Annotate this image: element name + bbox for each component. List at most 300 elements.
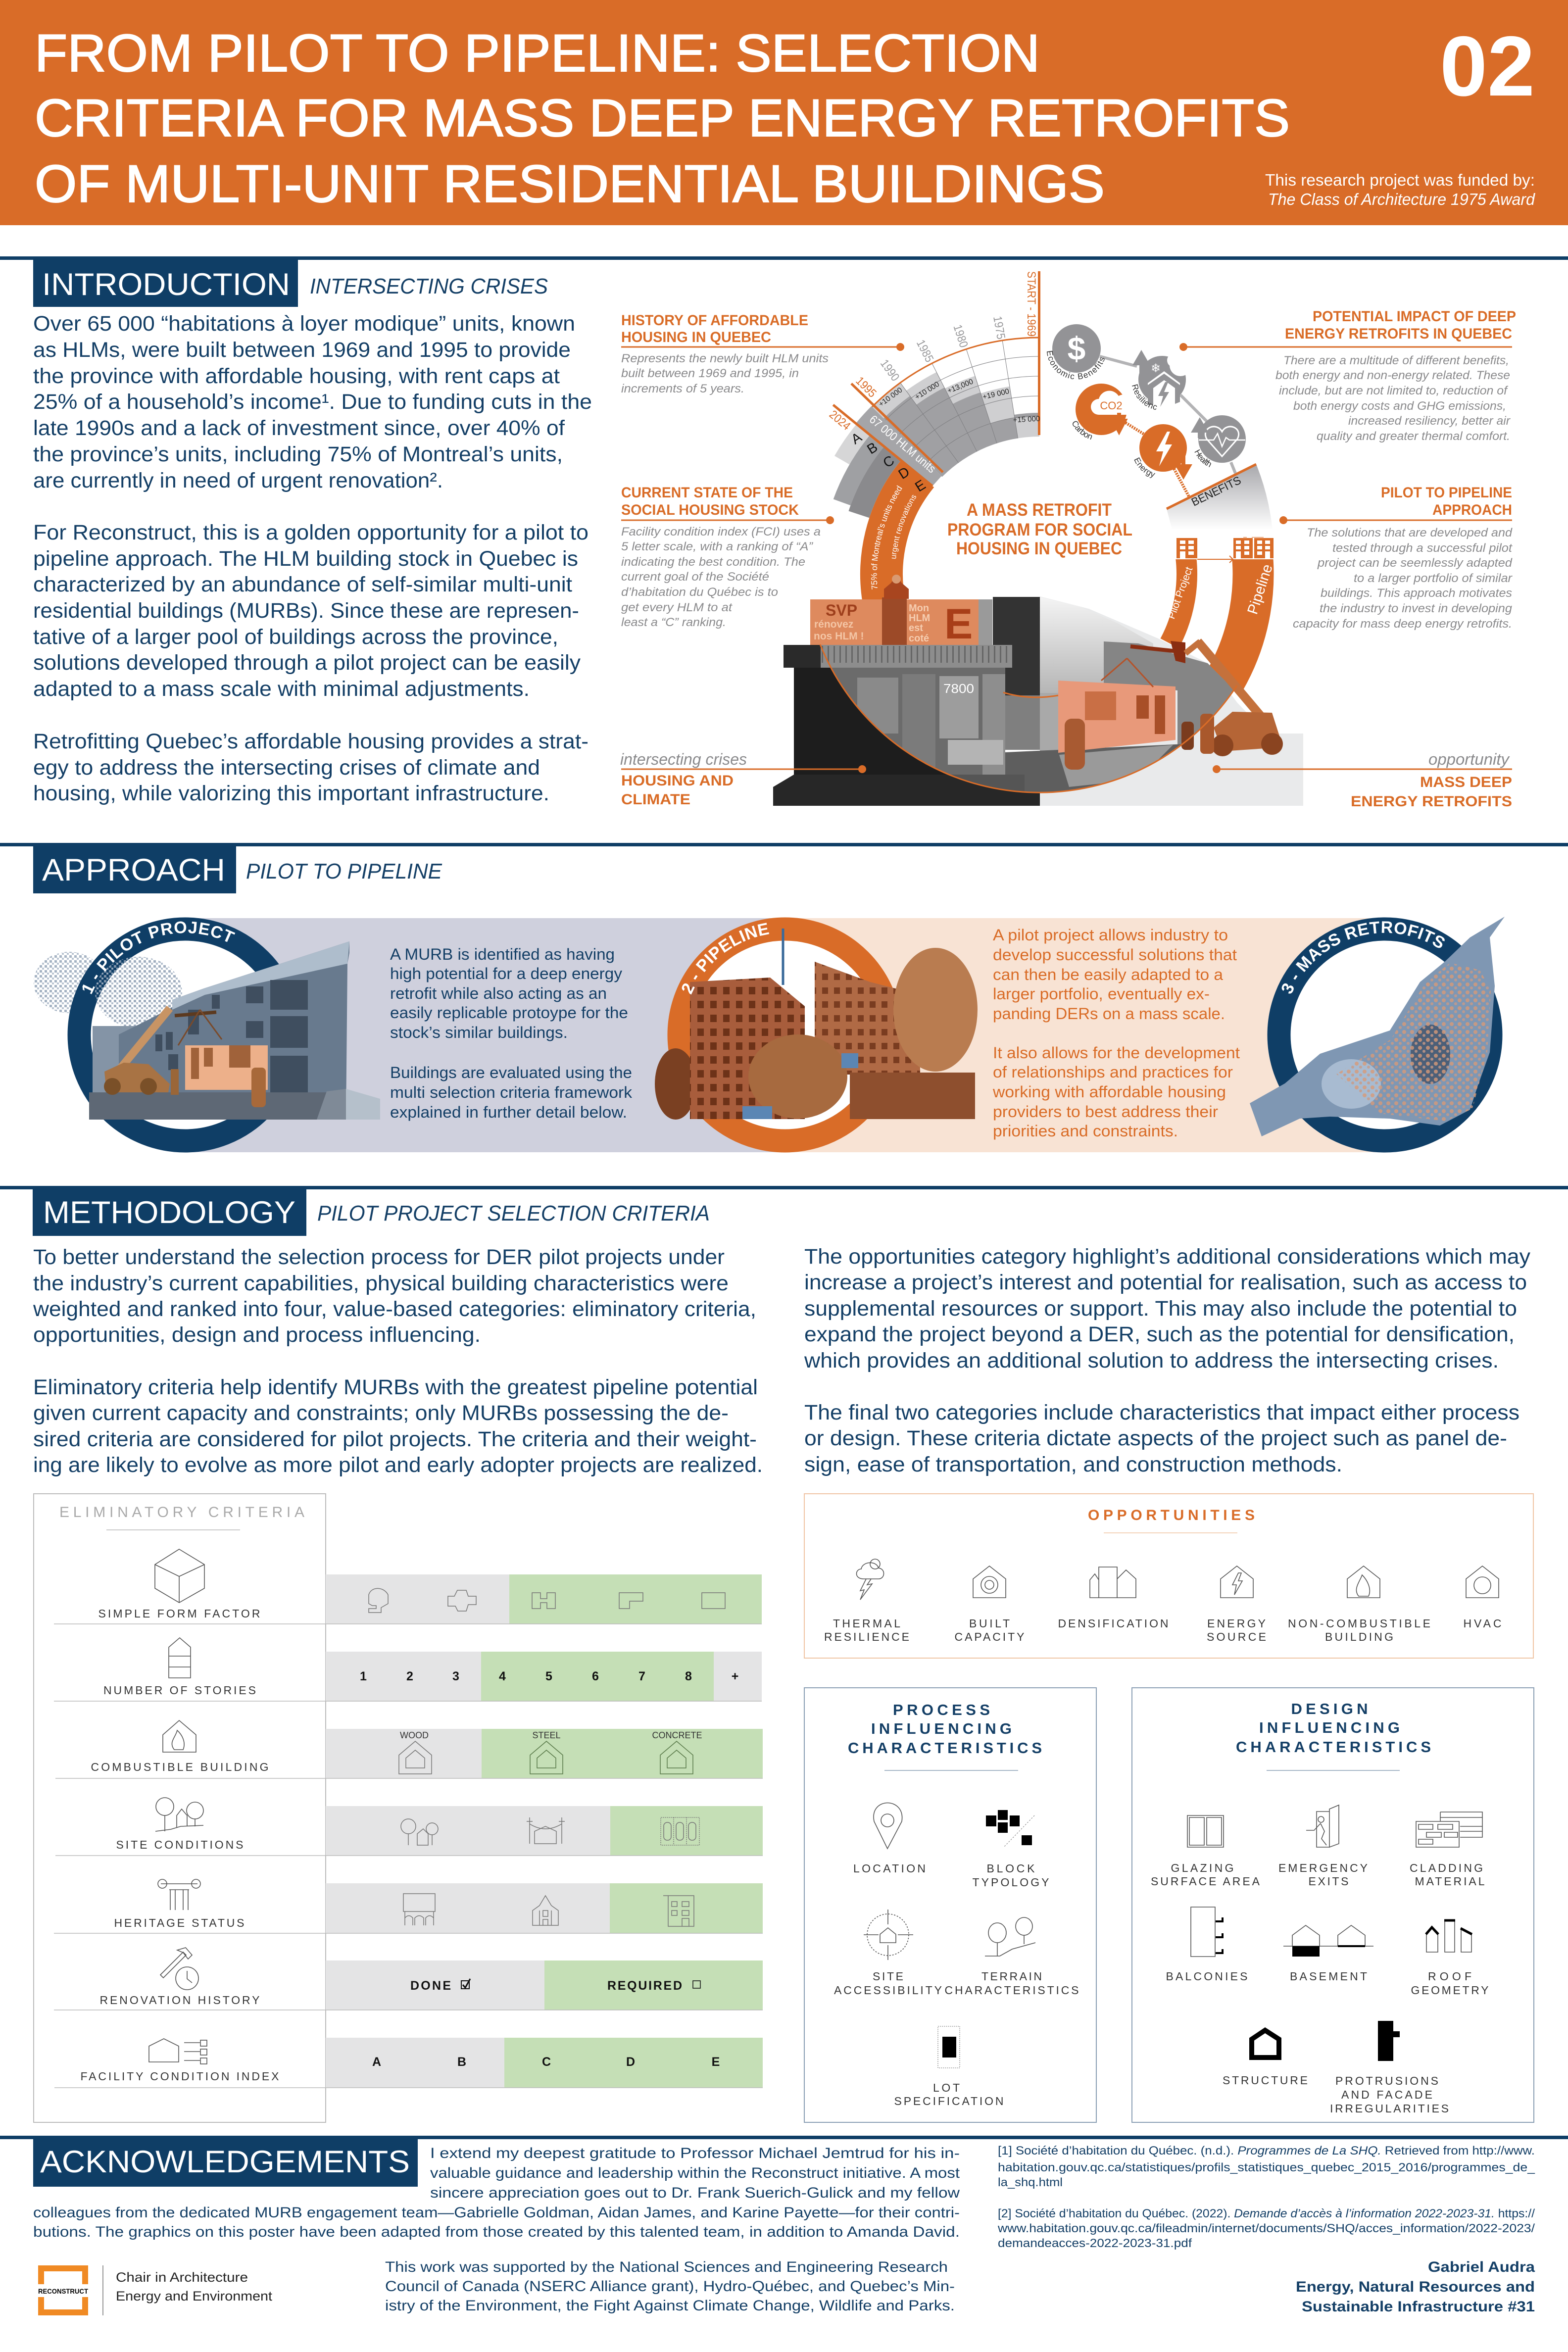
callout: housing and climate: intersecting crises: [620, 750, 747, 768]
text: pilot project: A MURB is identified as having: [390, 945, 615, 963]
callout: housing and climate: CLIMATE: [621, 791, 690, 808]
callout: potential impact: both energy costs and GHG emissions,: [1293, 399, 1506, 413]
callout: history of affordable housing: Represents the newly built HLM units: [621, 352, 829, 365]
row: site conditions: SITE CONDITIONS: [116, 1838, 244, 1851]
benefits network: [0, 0, 1246, 496]
scale: storey numbers: 3: [452, 1669, 459, 1683]
icon: economic benefits: Economic Benefits: [1045, 350, 1107, 382]
panel: methodology: [0, 1186, 1568, 2122]
text: right column: increase a project’s interest and potential for realisation, such as access to: [804, 1271, 1527, 1294]
callout: pilot to pipeline approach: tested through a successful pilot: [1332, 541, 1513, 555]
text: pipeline: panding DERs on a mass scale.: [993, 1005, 1225, 1023]
item: balconies: [1166, 1907, 1247, 1983]
protest banners: [810, 575, 992, 648]
intro text: egy to address the intersecting crises of climate and: [33, 756, 540, 780]
callout: current state of stock: 5 letter scale, with a ranking of “A”: [621, 540, 813, 553]
text: pilot project: Buildings are evaluated using the: [390, 1064, 632, 1081]
label: 2 - pipeline: 2 - PIPELINE: [678, 920, 771, 997]
icon: resiliency: ❄: [1151, 362, 1161, 375]
callout: history of affordable housing: [621, 312, 904, 395]
item: roof geometry: [1411, 1920, 1489, 1997]
row: heritage status: [54, 1879, 763, 1933]
heading: acknowledgements: ACKNOWLEDGEMENTS: [40, 2145, 410, 2179]
references: habitation.gouv.qc.ca/statistiques/profils_statistiques_quebec_2015_2016/programmes_de_: [998, 2161, 1535, 2174]
subheading: pilot to pipeline: PILOT TO PIPELINE: [246, 859, 442, 883]
text: right column: or design. These criteria dictate aspects of the project such as panel de-: [804, 1426, 1507, 1450]
item: structure: STRUCTURE: [1223, 2074, 1308, 2087]
done and required: DONE: [410, 1979, 451, 1993]
callout: potential impact: There are a multitude of different benefits,: [1283, 354, 1509, 367]
item: lot specification: LOT: [933, 2081, 960, 2094]
icon: hammer and clock: [160, 1948, 198, 1990]
diagram: mass retrofit wheel: [0, 0, 1516, 819]
icon: pipeline buildings: [1233, 516, 1274, 558]
text: pipeline: can then be easily adapted to a: [993, 966, 1223, 983]
logo: reconstruct: Energy and Environment: [116, 2289, 273, 2303]
references: www.habitation.gouv.qc.ca/fileadmin/internet/documents/SHQ/acces_information/2022-2023/: [997, 2222, 1535, 2235]
item: densification: [1058, 1567, 1168, 1630]
text: left column: opportunities, design and process influencing.: [33, 1323, 481, 1347]
label: 1 - pilot project: 1 - PILOT PROJECT: [78, 918, 237, 997]
callout: history of affordable housing: HISTORY OF AFFORDABLE: [621, 312, 808, 329]
callout: current state of stock: d’habitation du Québec is to: [621, 586, 778, 599]
item: roof geometry: ROOF: [1428, 1970, 1471, 1983]
item: terrain characteristics: TERRAIN: [981, 1970, 1042, 1983]
chart: facility condition index bands: C: [880, 452, 897, 471]
intro text: 25% of a household’s income¹. Due to funding cuts in the: [33, 390, 592, 414]
heading: design influencing: [1236, 1700, 1431, 1770]
text: pilot project: explained in further detail below.: [390, 1103, 627, 1121]
item: basement: [1283, 1925, 1373, 1983]
text: pipeline: priorities and constraints.: [993, 1122, 1178, 1140]
scale: storey numbers: 4: [499, 1669, 506, 1683]
row: combustible building: COMBUSTIBLE BUILDING: [91, 1761, 268, 1773]
scale: letters: D: [626, 2055, 635, 2069]
callout: potential impact: [1179, 308, 1516, 443]
intro text: [33, 312, 592, 805]
icons: site options: [401, 1817, 699, 1845]
intro text: residential buildings (MURBs). Since these are represen-: [33, 599, 579, 623]
intro text: For Reconstruct, this is a golden opportunity for a pilot to: [33, 521, 588, 544]
protest banners: rénovez: [814, 619, 853, 630]
item: terrain characteristics: [944, 1917, 1079, 1997]
funding statement: Council of Canada (NSERC Alliance grant), Hydro-Québec, and Quebec’s Min-: [385, 2278, 955, 2295]
icon: carbon: [1070, 384, 1135, 441]
item: glazing surface area: SURFACE AREA: [1151, 1875, 1260, 1888]
heading: acknowledgements: [33, 2139, 418, 2187]
text: pipeline: working with affordable housing: [992, 1083, 1226, 1101]
scale: letters: E: [712, 2055, 720, 2069]
scale: letters: A: [372, 2055, 381, 2069]
heading: process influencing: INFLUENCING: [871, 1720, 1012, 1737]
intro text: tative of a larger pool of buildings across the province,: [33, 625, 558, 649]
scale: storey numbers: 6: [592, 1669, 599, 1683]
diagram heading: PROGRAM FOR SOCIAL: [947, 520, 1132, 539]
text: pipeline: It also allows for the development: [993, 1044, 1240, 1062]
chart: HLM units built per five-year increment: 1995: [853, 374, 879, 400]
diagram heading: [947, 500, 1132, 558]
callout: potential impact: both energy and non-energy related. These: [1275, 369, 1510, 382]
item: glazing surface area: [1151, 1815, 1260, 1888]
pilot and pipeline bands: [1166, 464, 1276, 681]
panel: approach: [0, 843, 1568, 1152]
item: hvac: HVAC: [1463, 1617, 1502, 1630]
item: built capacity: [954, 1566, 1025, 1643]
logo: reconstruct: Chair in Architecture: [116, 2270, 248, 2285]
step 3: mass retrofits: [1250, 917, 1505, 1141]
chart: facility condition index bands: A: [848, 429, 865, 447]
chart: facility condition index bands: E: [912, 477, 928, 495]
header banner: [0, 0, 1568, 225]
callout: mass deep energy retrofits: [1213, 750, 1512, 810]
icon: energy: Energy: [1132, 456, 1157, 480]
callout: current state of stock: least a “C” ranking.: [621, 616, 726, 629]
text: pilot project: easily replicable protoype for the: [390, 1004, 628, 1022]
item: site accessibility: SITE: [873, 1970, 903, 1983]
scale: storey numbers: 2: [406, 1669, 413, 1683]
text: pipeline: larger portfolio, eventually ex-: [993, 985, 1210, 1003]
text: pipeline: A pilot project allows industry to: [993, 926, 1228, 944]
scale: storey numbers: 1: [360, 1669, 367, 1683]
author: Energy, Natural Resources and: [1296, 2279, 1535, 2295]
arrow: pilot to pipeline: [1197, 556, 1233, 563]
prefab retrofit panel: [1058, 658, 1176, 770]
scale: letters: [372, 2055, 720, 2069]
item: built capacity: BUILT: [969, 1617, 1010, 1630]
heading: methodology: [33, 1189, 306, 1236]
item: lot specification: [894, 2026, 1004, 2107]
text: pilot project: retrofit while also acting as an: [390, 984, 607, 1002]
row: facility condition index: FACILITY CONDITION INDEX: [80, 2070, 279, 2083]
callout: history of affordable housing: HOUSING IN QUEBEC: [621, 329, 771, 345]
text: right column: The opportunities category highlight’s additional considerations which may: [804, 1245, 1531, 1269]
item: non-combustible building: NON-COMBUSTIBLE: [1288, 1617, 1430, 1630]
text: acknowledgements: [33, 2145, 960, 2240]
chart: HLM units built per five-year increment: +15 000: [1013, 415, 1040, 424]
subheading: selection criteria: PILOT PROJECT SELECTION CRITERIA: [317, 1201, 710, 1225]
intro text: housing, while valorizing this important infrastructure.: [33, 782, 549, 805]
label: 3 - mass retrofits: 3 - MASS RETROFITS: [1277, 918, 1448, 997]
icon: flame house: [163, 1720, 196, 1752]
intro text: the province with affordable housing, with rent caps at: [33, 364, 560, 388]
heading: process influencing: [848, 1701, 1042, 1770]
text: pipeline: [992, 926, 1240, 1140]
item: built capacity: CAPACITY: [954, 1630, 1025, 1643]
item: site accessibility: ACCESSIBILITY: [834, 1984, 942, 1997]
icon: pilot building: [1176, 538, 1197, 558]
heading: introduction: INTRODUCTION: [42, 267, 290, 302]
heading: approach: [33, 846, 236, 893]
text: pilot project: stock’s similar buildings.: [390, 1024, 568, 1041]
intro text: characterized by an abundance of self-similar multi-unit: [33, 573, 572, 596]
callout: potential impact: increased resiliency, better air: [1348, 414, 1511, 428]
text: pipeline: develop successful solutions that: [993, 946, 1237, 964]
item: thermal resilience: RESILIENCE: [824, 1630, 909, 1643]
chart: HLM units built per five-year increment: 1990: [878, 357, 902, 384]
band: background strips: [185, 918, 1385, 1152]
image: pilot building: [89, 941, 380, 1120]
title: FROM PILOT TO PIPELINE: SELECTION: [35, 23, 1040, 83]
panel: design influencing characteristics: [1132, 1688, 1534, 2122]
callout: potential impact: POTENTIAL IMPACT OF DEEP: [1313, 308, 1516, 325]
icon: resiliency: Resiliency: [0, 0, 1159, 412]
chart: facility condition index bands: [833, 384, 943, 607]
funding statement: [385, 2259, 955, 2314]
chart: HLM units built per five-year increment: 2024: [827, 408, 853, 433]
item: location: [853, 1803, 926, 1875]
item: lot specification: SPECIFICATION: [894, 2095, 1004, 2107]
item: energy source: [1207, 1566, 1266, 1643]
item: structure: [1223, 2030, 1308, 2087]
chart: facility condition index bands: 67 000 HLM units: [867, 413, 938, 476]
materials: WOOD: [400, 1730, 429, 1740]
text: acknowledgements: butions. The graphics on this poster have been adapted from those created by this talented team, in addition to Amanda David.: [33, 2224, 960, 2240]
item: site accessibility: [834, 1910, 942, 1997]
scale: storey numbers: 8: [685, 1669, 692, 1683]
row: renovation history: [54, 1948, 763, 2010]
callout: pilot to pipeline approach: The solutions that are developed and: [1307, 526, 1513, 539]
row: number of stories: [54, 1638, 762, 1701]
callout: mass deep energy retrofits: opportunity: [1428, 750, 1510, 768]
callout: pilot to pipeline approach: [1279, 485, 1513, 631]
scale: letters: C: [542, 2055, 551, 2069]
icons: wall sections: [399, 1741, 693, 1774]
intro text: solutions developed through a pilot project can be easily: [33, 651, 581, 675]
title: OF MULTI-UNIT RESIDENTIAL BUILDINGS: [35, 154, 1105, 213]
image: pipeline towers: [655, 929, 978, 1120]
row: heritage status: HERITAGE STATUS: [114, 1916, 245, 1929]
callout: housing and climate: HOUSING AND: [621, 773, 734, 789]
panel: introduction: [0, 256, 1568, 810]
text: right column: The final two categories include characteristics that impact either process: [804, 1401, 1519, 1424]
callout: current state of stock: indicating the best condition. The: [621, 555, 805, 569]
callout: pilot to pipeline approach: PILOT TO PIPELINE: [1381, 485, 1512, 501]
diagram heading: A MASS RETROFIT: [967, 500, 1112, 520]
item: energy source: ENERGY: [1207, 1617, 1266, 1630]
icon: economic benefits: $: [1068, 330, 1085, 367]
item: block typology: TYPOLOGY: [972, 1876, 1049, 1889]
callout: current state of stock: SOCIAL HOUSING STOCK: [621, 502, 799, 518]
callout: current state of stock: [621, 485, 834, 629]
protest banners: est: [909, 623, 923, 634]
icon: carbon: CO2: [1100, 399, 1123, 412]
diagram heading: HOUSING IN QUEBEC: [956, 539, 1122, 558]
item: emergency exits: EXITS: [1309, 1875, 1348, 1888]
icon: house and checklist: [149, 2039, 207, 2064]
scale: storey numbers: +: [732, 1669, 738, 1683]
references: la_shq.html: [998, 2176, 1063, 2189]
pilot and pipeline bands: Pipeline: [1244, 562, 1276, 616]
text: pilot project: high potential for a deep energy: [390, 965, 622, 982]
step 1: pilot project: [34, 918, 380, 1141]
heading: methodology: METHODOLOGY: [43, 1195, 295, 1230]
callout: housing and climate: [620, 750, 866, 808]
item: emergency exits: EMERGENCY: [1278, 1862, 1368, 1874]
item: terrain characteristics: CHARACTERISTICS: [944, 1984, 1079, 1997]
text: right column: sign, ease of transportation, and construction methods.: [804, 1453, 1342, 1476]
intro text: Over 65 000 “habitations à loyer modique” units, known: [33, 312, 575, 336]
chart: facility condition index bands: B: [864, 439, 880, 457]
item: thermal resilience: [824, 1559, 909, 1643]
panel: process influencing characteristics: [804, 1688, 1096, 2122]
benefits band: BENEFITS: [1189, 474, 1243, 508]
row: facility condition index: [54, 2038, 763, 2088]
crane: [1130, 641, 1283, 756]
references: [997, 2144, 1535, 2250]
text: left column: Eliminatory criteria help identify MURBs with the greatest pipeline potential: [33, 1375, 758, 1399]
text: right column: which provides an additional solution to address the intersecting crises.: [804, 1349, 1499, 1372]
item: protrusions and facade irregularities: IRREGULARITIES: [1330, 2102, 1449, 2115]
protest banners: coté: [909, 633, 929, 644]
heading: opportunities: OPPORTUNITIES: [1088, 1507, 1255, 1523]
icons: heritage options: [403, 1894, 694, 1926]
row: combustible building: [55, 1720, 763, 1778]
chart: facility condition index bands: D: [895, 464, 912, 482]
text: acknowledgements: colleagues from the dedicated MURB engagement team—Gabrielle Goldman, Aidan James, and Karine Payette—for their contri-: [33, 2205, 960, 2221]
item: block typology: BLOCK: [987, 1862, 1035, 1875]
scale: storey numbers: 5: [545, 1669, 552, 1683]
text: right column: supplemental resources or support. This may also include the potential to: [804, 1297, 1517, 1321]
text: right column: [804, 1245, 1531, 1476]
text: left column: To better understand the selection process for DER pilot projects under: [33, 1245, 725, 1269]
photo collage: housing and retrofit: [773, 575, 1303, 819]
protest banners: nos HLM !: [814, 631, 864, 642]
icons: form options: [369, 1588, 725, 1613]
item: protrusions and facade irregularities: AND FACADE: [1341, 2088, 1432, 2101]
intro text: the province’s units, including 75% of Montreal’s units,: [33, 442, 563, 466]
item: location: LOCATION: [853, 1862, 926, 1875]
references: [2] Société d’habitation du Québec. (2022). Demande d’accès à l’information 2022-2023-31. https://: [998, 2207, 1535, 2220]
done and required: [410, 1979, 700, 1993]
chart centre disc: [902, 437, 1177, 712]
panel: acknowledgements: [0, 2136, 1568, 2315]
references: demandeacces-2022-2023-31.pdf: [998, 2237, 1192, 2250]
funding note: [1265, 171, 1536, 208]
scale: storey numbers: [360, 1669, 738, 1683]
callout: history of affordable housing: increments of 5 years.: [621, 382, 744, 395]
icon: health: Health: [1192, 448, 1214, 469]
pilot and pipeline bands: Pilot Project: [1166, 565, 1195, 621]
callout: history of affordable housing: built between 1969 and 1995, in: [621, 367, 799, 380]
heading: approach: APPROACH: [42, 853, 225, 887]
callout: potential impact: include, but are not limited to, reduction of: [1279, 384, 1508, 397]
intro text: are currently in need of urgent renovation².: [33, 469, 443, 492]
heading: eliminatory criteria: ELIMINATORY CRITERIA: [59, 1504, 304, 1520]
icon: carbon: Carbon: [1070, 419, 1094, 441]
callout: pilot to pipeline approach: project can be seemlessly adapted: [1317, 556, 1513, 570]
heading: design influencing: DESIGN: [1291, 1700, 1368, 1717]
funding statement: istry of the Environment, the Fight Against Climate Change, Wildlife and Parks.: [385, 2298, 955, 2314]
chart: HLM units built per five-year increment: 1985: [914, 338, 936, 364]
callout: current state of stock: current goal of the Société: [621, 570, 769, 584]
item: cladding material: CLADDING: [1410, 1862, 1483, 1874]
intro text: pipeline approach. The HLM building stock in Quebec is: [33, 547, 578, 571]
item: non-combustible building: BUILDING: [1325, 1630, 1393, 1643]
text: left column: weighted and ranked into four, value-based categories: eliminatory criteria,: [33, 1297, 756, 1321]
row: renovation history: RENOVATION HISTORY: [100, 1994, 259, 2007]
item: hvac: [1463, 1566, 1502, 1630]
text: acknowledgements: I extend my deepest gratitude to Professor Michael Jemtrud for his in-: [430, 2145, 960, 2161]
item: non-combustible building: [1288, 1566, 1430, 1643]
chart: HLM units built per five-year increment: [827, 271, 1177, 712]
item: densification: DENSIFICATION: [1058, 1617, 1168, 1630]
text: right column: expand the project beyond a DER, such as the potential for densification,: [804, 1323, 1515, 1346]
author: Sustainable Infrastructure #31: [1302, 2299, 1535, 2315]
chart: facility condition index bands: 75% of Montreal’s units need: [871, 485, 902, 589]
intro text: late 1990s and a lack of investment since, over 40% of: [33, 416, 565, 440]
callout: potential impact: ENERGY RETROFITS IN QUEBEC: [1285, 326, 1512, 342]
text: pipeline: providers to best address their: [993, 1103, 1218, 1121]
done and required: REQUIRED: [607, 1979, 682, 1993]
item: cladding material: [1410, 1812, 1485, 1888]
callout: pilot to pipeline approach: buildings. This approach motivates: [1321, 587, 1512, 600]
text: left column: [33, 1245, 763, 1477]
chart: HLM units built per five-year increment: +10 000: [914, 380, 941, 401]
callout: pilot to pipeline approach: APPROACH: [1432, 502, 1512, 518]
callout: current state of stock: Facility condition index (FCI) uses a: [621, 525, 821, 539]
intro text: as HLMs, were built between 1969 and 1995 to provide: [33, 338, 571, 362]
callout: current state of stock: CURRENT STATE OF THE: [621, 485, 793, 501]
item: emergency exits: [1278, 1805, 1368, 1888]
text: left column: ing are likely to evolve as more pilot and early adopter projects are realized.: [33, 1453, 763, 1477]
text: pilot project: [390, 945, 633, 1121]
subheading: intersecting crises: INTERSECTING CRISES: [310, 274, 548, 298]
chart: facility condition index bands: urgent renovations: [892, 495, 916, 559]
intro text: Retrofitting Quebec’s affordable housing provides a strat-: [33, 730, 588, 753]
funding statement: This work was supported by the National Sciences and Engineering Research: [385, 2259, 948, 2275]
panel: eliminatory criteria: [34, 1494, 763, 2122]
text: left column: sired criteria are considered for pilot projects. The criteria and their weight-: [33, 1427, 757, 1451]
protest banners: HLM: [909, 613, 930, 624]
item: cladding material: MATERIAL: [1415, 1875, 1485, 1888]
protest banners: E: [944, 600, 973, 648]
callout: mass deep energy retrofits: ENERGY RETROFITS: [1351, 793, 1512, 810]
references: [1] Société d’habitation du Québec. (n.d.). Programmes de La SHQ. Retrieved from http://www.: [998, 2144, 1535, 2157]
text: left column: the industry’s current capabilities, physical building characteristics were: [33, 1272, 729, 1295]
chart: HLM units built per five-year increment: 1980: [950, 323, 971, 349]
scale: storey numbers: 7: [638, 1669, 645, 1683]
text: acknowledgements: valuable guidance and leadership within the Reconstruct initiative. A most: [430, 2165, 960, 2181]
heading: process influencing: CHARACTERISTICS: [848, 1739, 1042, 1757]
item: protrusions and facade irregularities: PROTRUSIONS: [1335, 2074, 1438, 2087]
icon: trees and site: [155, 1798, 203, 1831]
photo collage: housing and retrofit: 7800: [943, 681, 974, 696]
item: thermal resilience: THERMAL: [833, 1617, 900, 1630]
callout: pilot to pipeline approach: the industry to invest in developing: [1320, 602, 1513, 615]
author: Gabriel Audra: [1428, 2259, 1535, 2275]
author: [1296, 2259, 1535, 2315]
heading: introduction: [33, 260, 298, 307]
materials: [400, 1730, 702, 1740]
poster number: 02: [1440, 19, 1535, 114]
text: pilot project: multi selection criteria framework: [390, 1083, 633, 1101]
chart: HLM units built per five-year increment: START - 1969: [1025, 271, 1038, 337]
callout: pilot to pipeline approach: to a larger portfolio of similar: [1354, 572, 1513, 585]
funding note: This research project was funded by:: [1265, 171, 1535, 189]
benefits band: [1167, 464, 1273, 537]
scale: letters: B: [457, 2055, 466, 2069]
logo: reconstruct: [38, 2265, 273, 2315]
callout: pilot to pipeline approach: capacity for mass deep energy retrofits.: [1293, 617, 1512, 631]
callout: current state of stock: get every HLM to at: [621, 601, 733, 614]
item: glazing surface area: GLAZING: [1171, 1862, 1233, 1874]
row: site conditions: [55, 1798, 763, 1856]
icon: economic benefits: [1045, 324, 1107, 382]
text: left column: given current capacity and constraints; only MURBs possessing the de-: [33, 1401, 729, 1425]
materials: CONCRETE: [652, 1730, 702, 1740]
icon: cube: [155, 1549, 204, 1603]
callout: potential impact: quality and greater thermal comfort.: [1317, 430, 1510, 443]
